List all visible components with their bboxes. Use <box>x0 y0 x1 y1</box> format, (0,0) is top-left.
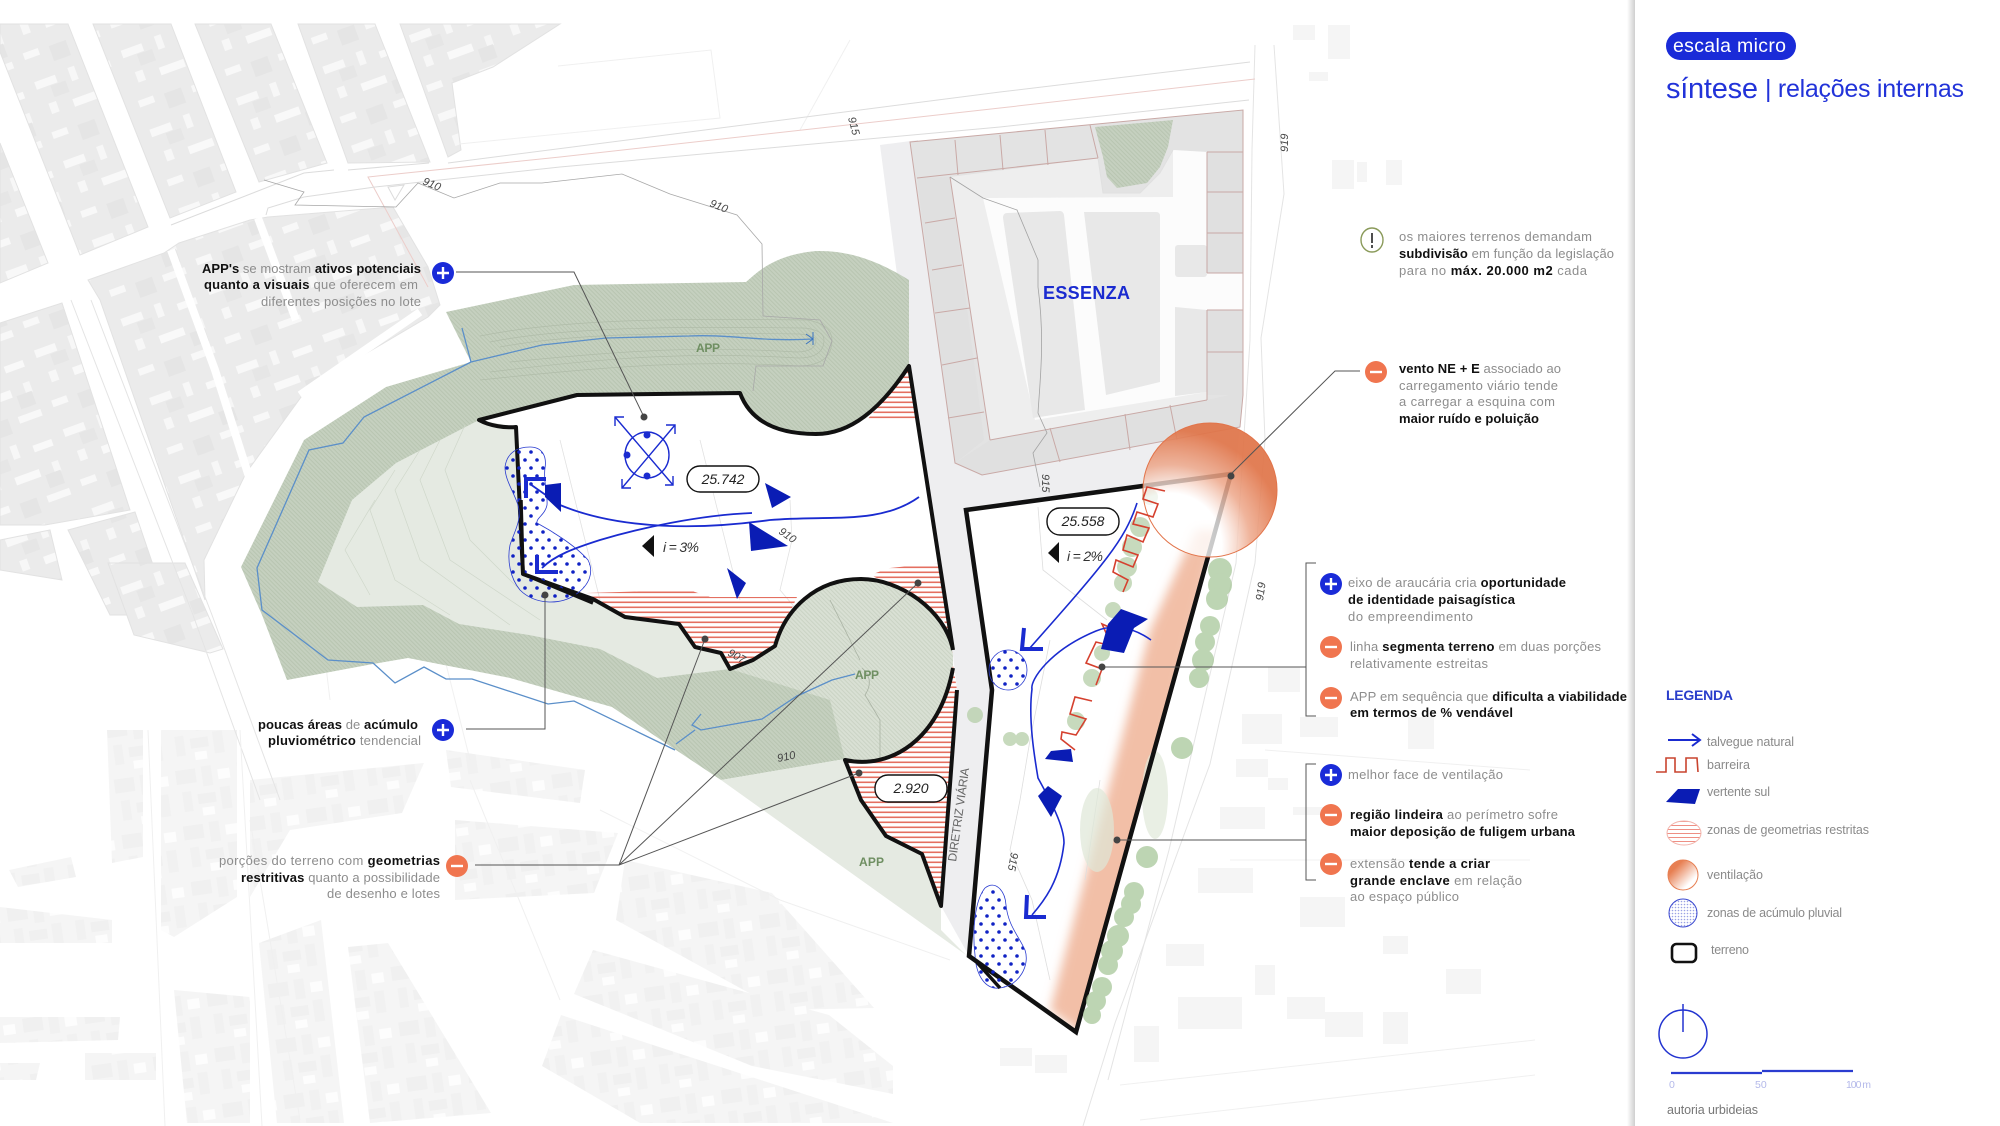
panel: sidebar <box>1627 0 2000 1126</box>
callout: extensão enclave: extensão tende a criar <box>1350 856 1490 871</box>
callout: extensão enclave: grande enclave em relação <box>1350 873 1522 888</box>
area label 25.558: 25.558 <box>1061 513 1105 529</box>
title: síntese: síntese <box>1666 73 1758 105</box>
callout: geometrias restritivas <box>219 853 468 901</box>
callout: APP's ativos potenciais: diferentes posições no lote <box>261 294 421 309</box>
panel: diretriz viária road band <box>880 140 1240 956</box>
scale bar: 50 <box>1755 1079 1767 1091</box>
hatched zones of restricted geometry <box>587 366 957 906</box>
legend: zonas de acúmulo pluvial: zonas de acúmulo pluvial <box>1707 906 1842 920</box>
callout: subdivisão warning: para no máx. 20.000 m2 cada <box>1399 263 1588 278</box>
legend: terreno: terreno <box>1711 943 1749 957</box>
legend: barreira <box>1656 758 1750 772</box>
label: APP circle: APP <box>855 668 879 682</box>
legend: vertente sul <box>1666 785 1770 804</box>
slope label west: i = 3% <box>663 539 699 555</box>
callout: linha segmenta terreno: linha segmenta terreno em duas porções <box>1350 639 1602 654</box>
area label 25.742 <box>687 466 759 492</box>
callout: subdivisão warning <box>1361 228 1614 278</box>
callout: vento NE + E <box>1365 361 1561 426</box>
callout: eixo de araucária: do empreendimento <box>1348 609 1473 624</box>
callout: poucas áreas: poucas áreas de acúmulo <box>258 717 418 732</box>
contour labels: 919 <box>1254 582 1269 601</box>
legend: vertente sul: vertente sul <box>1707 785 1770 799</box>
trees along the avenue <box>1083 558 1232 1024</box>
scale bar <box>1669 1071 1871 1091</box>
pill: escala micro: escala micro <box>1673 35 1786 57</box>
callout: APP's ativos potenciais: APP's se mostram ativos potenciais <box>202 261 421 276</box>
label: APP north: APP <box>696 341 720 355</box>
label: APP south: APP <box>859 855 884 869</box>
legend: terreno <box>1672 943 1749 962</box>
scale bar: 100 m <box>1846 1079 1871 1091</box>
barriers: red zigzag <box>1061 487 1165 750</box>
pill: escala micro <box>1666 32 1796 60</box>
area label 2.920 <box>875 775 947 802</box>
legend: zonas de geometrias restritas <box>1667 821 1869 845</box>
north arrow <box>1659 1004 1707 1058</box>
legend: talvegue natural <box>1668 734 1794 749</box>
callout: subdivisão warning: subdivisão em função da legislação <box>1399 246 1614 261</box>
legend: zonas de acúmulo pluvial <box>1669 899 1842 927</box>
APP circle <box>730 579 953 762</box>
contour labels: 910 <box>421 176 443 194</box>
ventilation circle at the corner <box>1143 423 1277 557</box>
callout: APP em sequência: APP em sequência que dificulta a viabilidade <box>1350 689 1627 704</box>
callout: geometrias restritivas: porções do terreno com geometrias <box>219 853 440 868</box>
legend: barreira: barreira <box>1707 758 1750 772</box>
terrain: contour line around site <box>264 174 832 391</box>
area label 2.920: 2.920 <box>892 780 929 796</box>
contour labels <box>421 116 1291 873</box>
scale bar: 0 <box>1669 1079 1675 1091</box>
callout: APP's ativos potenciais <box>202 261 454 309</box>
contour labels: 910 <box>776 749 797 765</box>
area label 25.558 <box>1047 508 1119 535</box>
panel: east terrain parcel <box>966 474 1231 1040</box>
ventilation strip <box>1050 530 1218 1040</box>
panel: ESSENZA neighbouring development <box>910 110 1243 487</box>
callout: eixo de araucária <box>1320 573 1566 624</box>
callout: vento NE + E: maior ruído e poluição <box>1399 411 1539 426</box>
callout: melhor face de ventilação <box>1320 764 1503 786</box>
contour labels: 919 <box>1279 134 1291 152</box>
callout: extensão enclave: ao espaço público <box>1350 889 1459 904</box>
callout: vento NE + E: carregamento viário tende <box>1399 378 1558 393</box>
legend: talvegue natural: talvegue natural <box>1707 735 1794 749</box>
callout: eixo de araucária: eixo de araucária cria oportunidade <box>1348 575 1566 590</box>
callout: poucas áreas <box>258 717 454 748</box>
icon: view cross <box>615 417 675 488</box>
map background: surrounding urban blocks <box>0 24 1535 1126</box>
contour labels: 907 <box>726 647 748 667</box>
callout: região lindeira <box>1320 804 1576 839</box>
south slope shapes <box>545 483 1148 817</box>
terrain outline <box>479 366 957 906</box>
legend heading: LEGENDA <box>1666 687 1733 703</box>
area label 25.742: 25.742 <box>701 471 745 487</box>
leader lines <box>456 272 1360 880</box>
contour labels: 910 <box>776 526 799 546</box>
callout: geometrias restritivas: restritivas quanto a possibilidade <box>241 870 440 885</box>
contour labels: 915 <box>845 116 862 137</box>
callout: eixo de araucária: de identidade paisagística <box>1348 592 1516 607</box>
pluvial accumulation zones <box>505 447 1027 988</box>
slope label east: i = 2% <box>1067 548 1103 564</box>
contour labels: 915 <box>1039 474 1051 493</box>
slope label west <box>642 535 699 557</box>
stream: southern talvegue <box>676 674 855 744</box>
contour labels: 910 <box>708 198 730 216</box>
contour labels: 915 <box>1005 851 1020 873</box>
vegetation inside terrain <box>967 489 1158 746</box>
title divider and subtitle: | relações internas <box>1765 75 1964 103</box>
callout: linha segmenta terreno <box>1320 636 1602 671</box>
callout: APP's ativos potenciais: quanto a visuais que oferecem em <box>204 277 418 292</box>
callout: melhor face de ventilação: melhor face de ventilação <box>1348 767 1503 782</box>
label: diretriz viária: DIRETRIZ VIÁRIA <box>944 766 972 862</box>
slope label east <box>1048 542 1103 564</box>
callout: vento NE + E: vento NE + E associado ao <box>1399 361 1561 376</box>
label: ESSENZA: ESSENZA <box>1043 283 1130 303</box>
callout: subdivisão warning: os maiores terrenos demandam <box>1399 229 1592 244</box>
natural thalweg arrows <box>526 479 1151 917</box>
callout: APP em sequência: em termos de % vendável <box>1350 705 1513 720</box>
legend: zonas de geometrias restritas: zonas de geometrias restritas <box>1707 823 1869 837</box>
legend: ventilação <box>1668 860 1763 890</box>
credit: autoria urbideias <box>1667 1103 1758 1117</box>
callout: APP em sequência <box>1320 687 1627 720</box>
panel: APP green area <box>241 251 966 955</box>
callout: região lindeira: maior deposição de fuligem urbana <box>1350 824 1576 839</box>
stream: west talvegue <box>257 328 813 750</box>
callout: extensão enclave <box>1320 853 1522 904</box>
callout: região lindeira: região lindeira ao perímetro sofre <box>1350 807 1558 822</box>
callout: poucas áreas: pluviométrico tendencial <box>268 733 421 748</box>
callout: linha segmenta terreno: relativamente estreitas <box>1350 656 1488 671</box>
callout: vento NE + E: a carregar a esquina com <box>1399 394 1555 409</box>
panel: west terrain parcel <box>479 366 957 906</box>
callout: geometrias restritivas: de desenho e lotes <box>327 886 440 901</box>
legend: ventilação: ventilação <box>1707 868 1763 882</box>
